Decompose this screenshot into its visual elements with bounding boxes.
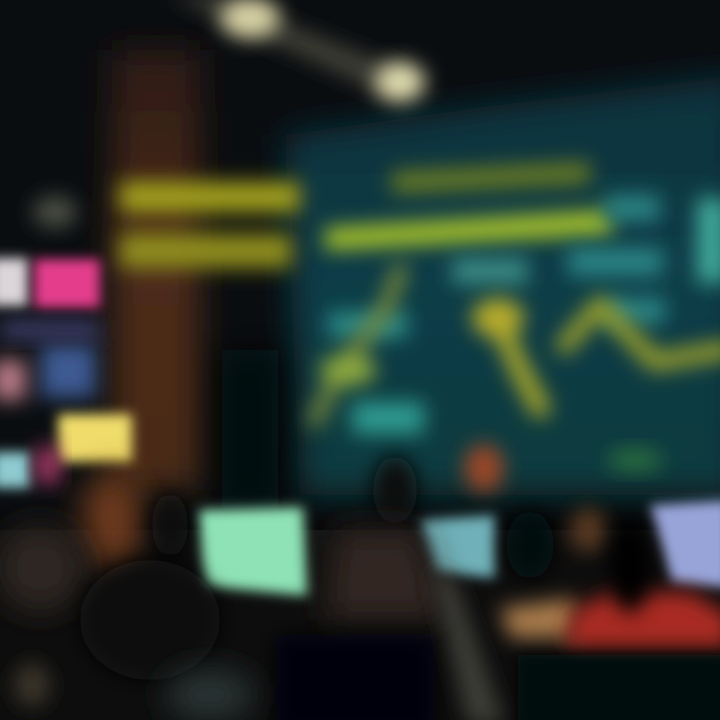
poster: white bbox=[0, 258, 28, 306]
dark figure in front of screen bbox=[222, 350, 278, 510]
person: center back chair bbox=[275, 635, 435, 720]
headline top right bbox=[392, 162, 590, 193]
person: orange glow arm bbox=[82, 472, 142, 568]
poster: faded purple bbox=[0, 320, 100, 340]
brick column bbox=[112, 50, 200, 490]
laptop: lavender screen bbox=[650, 500, 720, 588]
person: left edge figure bbox=[0, 524, 84, 612]
person: bottom blue figure bbox=[165, 670, 255, 720]
poster: light blue bbox=[0, 452, 30, 488]
green glow under screen bbox=[607, 449, 663, 471]
poster: blue bbox=[40, 344, 96, 398]
audience dark band bbox=[0, 530, 720, 720]
poster: yellow bbox=[58, 414, 132, 462]
person: center head bbox=[373, 456, 417, 524]
block: center bbox=[452, 258, 528, 284]
ceiling lights bbox=[170, 0, 425, 102]
person: bottom left head bbox=[14, 663, 50, 707]
light: left bbox=[220, 0, 280, 38]
block: top right bbox=[605, 195, 660, 221]
person: right hair bbox=[610, 517, 650, 613]
poster: salmon bbox=[0, 360, 26, 400]
projection screen bbox=[285, 75, 720, 495]
audience silhouettes bbox=[0, 456, 720, 720]
left wall posters bbox=[0, 196, 132, 488]
person: bottom right seat bbox=[518, 655, 720, 720]
chart blob bbox=[472, 298, 524, 338]
block: far right bbox=[697, 198, 720, 283]
person: right head bbox=[570, 508, 606, 552]
block: left upper bbox=[328, 312, 408, 338]
block: left lower bbox=[352, 402, 424, 434]
block: lower right bbox=[605, 298, 665, 324]
headline lime row bbox=[325, 210, 612, 250]
light: right bbox=[375, 62, 425, 102]
yellow headline text on screen bbox=[120, 162, 612, 268]
chart blob left bbox=[320, 354, 376, 386]
person: center arm bbox=[432, 570, 505, 720]
person: right arm skin bbox=[500, 598, 575, 638]
person: center body bbox=[325, 530, 445, 620]
yellow-green chart line bbox=[315, 270, 720, 420]
laptops bbox=[198, 500, 720, 596]
poster: pink bbox=[34, 259, 100, 308]
laptop: mint screen bbox=[198, 507, 308, 596]
person: red shirt bbox=[565, 592, 720, 648]
headline row 1 left bbox=[120, 182, 300, 212]
person: dark figure bbox=[506, 511, 554, 579]
teal text blocks on screen bbox=[328, 195, 720, 434]
person: head left bbox=[152, 493, 188, 557]
light beam bbox=[170, 0, 410, 95]
red object on screen edge bbox=[464, 444, 504, 492]
block: middle right bbox=[568, 248, 663, 276]
person: body left bbox=[80, 560, 220, 680]
poster: dim round light bbox=[33, 196, 77, 228]
laptop: blue screen bbox=[420, 515, 495, 578]
headline row 2 left bbox=[120, 234, 292, 268]
poster: magenta bbox=[36, 447, 60, 483]
